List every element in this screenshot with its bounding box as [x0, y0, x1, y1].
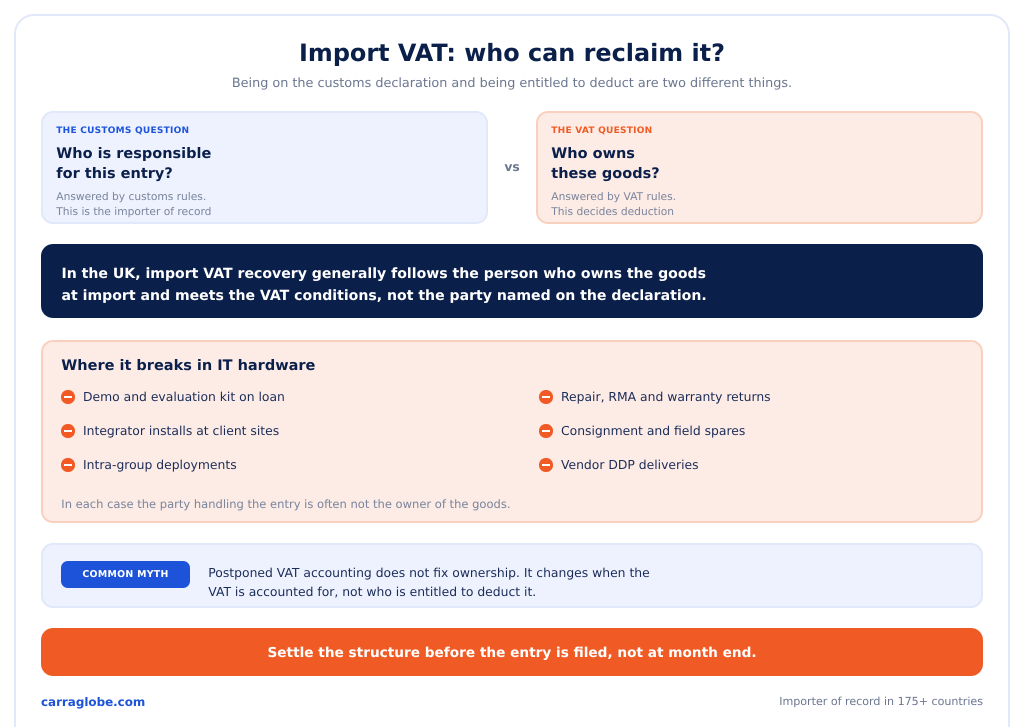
myth text: [208, 566, 650, 598]
item: intra-group: Intra-group deployments: [83, 458, 237, 472]
panel heading: Where it breaks in IT hardware: [61, 358, 315, 374]
customs question heading: Who is responsible: [56, 146, 211, 162]
key statement banner: [41, 244, 983, 318]
footer website: carraglobe.com: [41, 694, 145, 708]
item: repair: Repair, RMA and warranty returns: [561, 390, 771, 404]
call to action banner: [41, 628, 983, 676]
panel: common myth: [41, 543, 983, 608]
customs question heading: for this entry?: [56, 166, 173, 182]
myth badge: COMMON MYTH: [82, 569, 169, 580]
panel: where it breaks: [41, 340, 983, 523]
customs note: This is the importer of record: [56, 205, 211, 218]
item: vendor DDP: Vendor DDP deliveries: [561, 458, 699, 472]
subtitle: Being on the customs declaration and being entitled to deduct are two different things.: [232, 76, 792, 90]
title: Import VAT: who can reclaim it?: [299, 39, 725, 67]
panel footnote: In each case the party handling the entry is often not the owner of the goods.: [61, 496, 510, 510]
VAT note: This decides deduction: [551, 205, 674, 218]
panel: customs question: [41, 111, 488, 224]
VAT note: [551, 190, 676, 218]
VAT eyebrow: THE VAT QUESTION: [551, 126, 652, 136]
VAT question heading: [551, 146, 660, 182]
item: consignment: Consignment and field spares: [561, 424, 745, 438]
customs note: [56, 190, 211, 218]
footer tagline: Importer of record in 175+ countries: [779, 695, 983, 708]
customs eyebrow: THE CUSTOMS QUESTION: [56, 126, 189, 136]
panel: VAT question: [536, 111, 983, 224]
VAT note: Answered by VAT rules.: [551, 190, 676, 203]
item: demo kit: Demo and evaluation kit on loan: [83, 390, 285, 404]
myth text: Postponed VAT accounting does not fix ownership. It changes when the: [208, 566, 650, 580]
customs question heading: [56, 146, 211, 182]
vs label: vs: [504, 160, 520, 174]
call to action text: Settle the structure before the entry is filed, not at month end.: [267, 644, 757, 660]
myth badge: [61, 561, 190, 588]
myth text: VAT is accounted for, not who is entitled to deduct it.: [208, 584, 536, 598]
VAT question heading: Who owns: [551, 146, 635, 162]
key statement text: at import and meets the VAT conditions, not the party named on the declaration.: [62, 288, 707, 304]
customs note: Answered by customs rules.: [56, 190, 206, 203]
key statement text: In the UK, import VAT recovery generally follows the person who owns the goods: [62, 266, 706, 282]
item: integrator: Integrator installs at client sites: [83, 424, 279, 438]
key statement text: [62, 266, 707, 304]
VAT question heading: these goods?: [551, 166, 660, 182]
